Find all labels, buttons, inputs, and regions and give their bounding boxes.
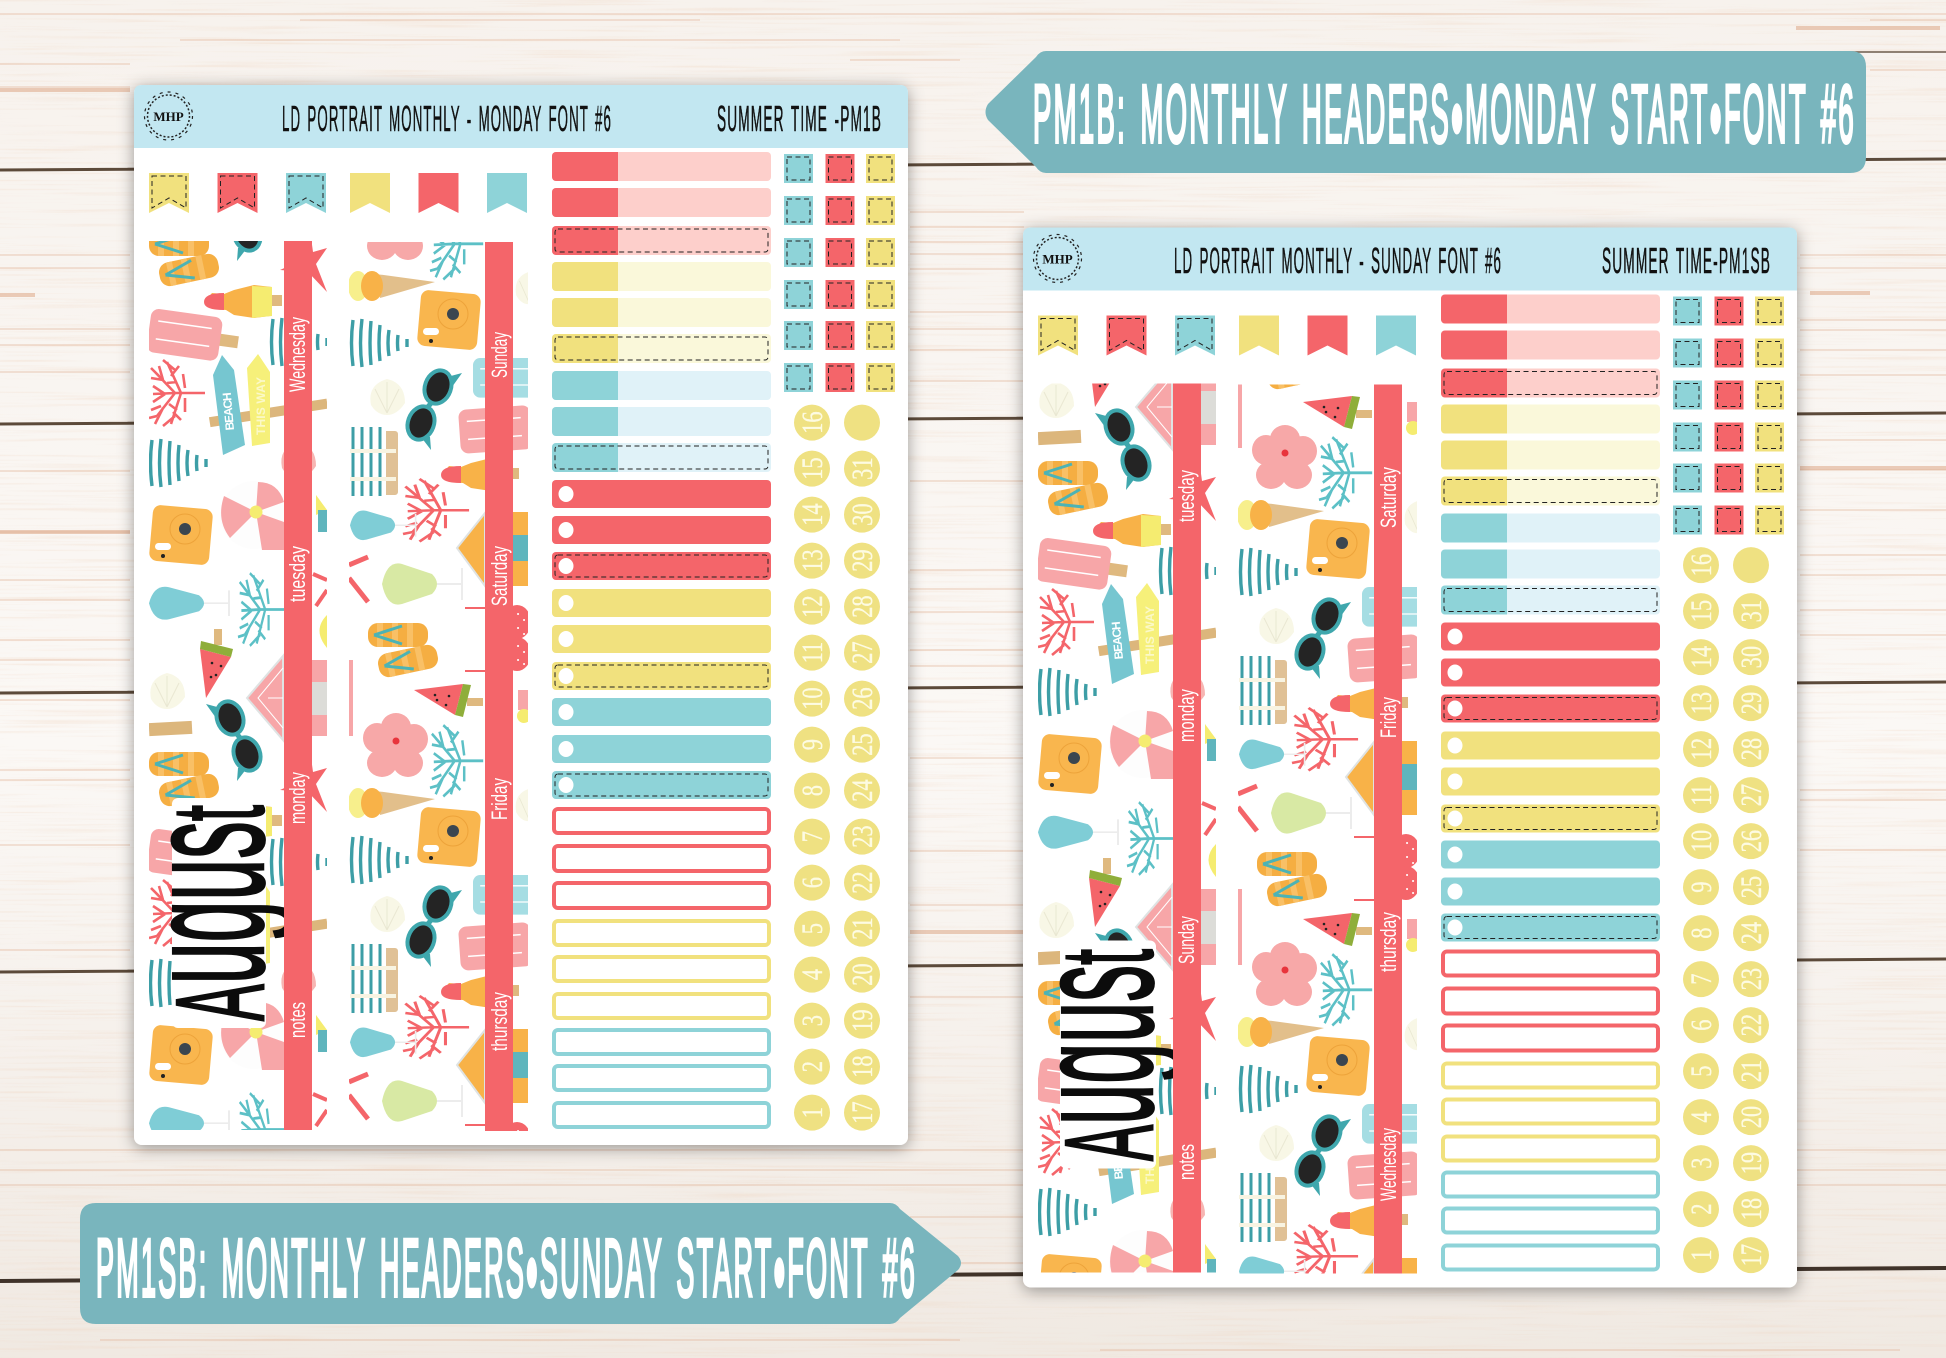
small dashed squares [784,154,895,392]
date circles: 1 [795,1107,829,1118]
date circles: 24 [845,779,879,802]
date circles: 6 [1684,1019,1718,1031]
date circles: 22 [845,871,879,894]
weekday band left: Wednesday [285,317,310,392]
date circles [1683,547,1769,1273]
date circles: 8 [795,785,829,796]
sheet: PM1B Monday start [110,85,908,1260]
date circles: 25 [845,733,879,756]
date circles: 29 [1734,692,1768,714]
outline bars [554,809,769,1127]
patterned strip left [149,241,327,1130]
date circles: 30 [845,503,879,526]
month name: August: August [999,949,1189,1161]
banner: PM1B monthly headers, pointing left [986,51,1866,174]
banner: PM1B monthly headers, pointing left: • [1451,62,1465,174]
banner: PM1SB monthly headers, pointing right: PM1SB: MONTHLY HEADERS [96,1223,1406,1314]
date circles: 14 [1684,646,1718,668]
weekday band right: Friday [1376,697,1401,738]
date circles: 13 [795,549,829,572]
date circles: 15 [1684,600,1718,622]
date circles: 18 [845,1055,879,1078]
bars with white dot [1441,622,1660,942]
date circles: 26 [1734,830,1768,852]
date circles: 20 [1734,1106,1768,1128]
date circles: 31 [1734,600,1768,622]
logo: MHP wreath [144,92,192,140]
date circles: 2 [1684,1203,1718,1215]
banner: PM1SB monthly headers, pointing right: SUNDAY START [540,1223,774,1314]
date circles: 17 [1734,1244,1768,1266]
date circles: 10 [1684,830,1718,852]
weekday band right [485,242,513,1131]
weekday band right: thursday [1376,912,1401,972]
date circles: 31 [845,457,879,480]
date circles: 28 [845,595,879,618]
date circles: 9 [795,739,829,750]
date circles: 22 [1734,1014,1768,1036]
weekday band left: Sunday [1174,916,1199,964]
banner: PM1SB monthly headers, pointing right [80,1203,961,1328]
date circles: 12 [795,595,829,618]
date circles: 27 [845,641,879,664]
sheet: PM1SB Sunday start [999,228,1797,1332]
two-tone header bars [552,152,771,472]
weekday band right: Friday [487,778,512,820]
date circles: 20 [845,963,879,986]
weekday band right: thursday [487,992,512,1051]
banner: PM1SB monthly headers, pointing right: • [774,1216,787,1328]
date circles: 13 [1684,692,1718,714]
date circles: 23 [1734,968,1768,990]
weekday band right: Saturday [1376,467,1401,528]
date circles [794,405,880,1131]
patterned strip left [1038,384,1216,1272]
date circles: 10 [795,687,829,710]
text: SUMMER TIME -PM1B [717,98,882,139]
date circles: 16 [1684,554,1718,576]
date circles: 15 [795,457,829,480]
date circles: 17 [845,1101,879,1124]
logo: MHP wreath: MHP [1042,252,1073,266]
date circles: 5 [1684,1065,1718,1077]
date circles: 21 [845,917,879,940]
date circles: 27 [1734,784,1768,806]
banner: PM1SB monthly headers, pointing right: • [526,1216,540,1328]
small dashed squares [1673,296,1784,534]
patterned strip right [349,242,528,1131]
white backing behind month name [1060,940,1156,1168]
date circles: 11 [795,642,829,663]
weekday band right: Wednesday [1376,1128,1401,1201]
sheet card [134,85,908,1145]
pennant flags [149,173,527,213]
patterned strip right [1238,384,1417,1274]
weekday band right [1374,384,1402,1274]
date circles: 6 [795,877,829,888]
weekday band left: tuesday [285,546,310,602]
date circles: 16 [795,411,829,434]
sheet header bar [1023,228,1797,290]
weekday band left [1173,384,1201,1272]
date circles: 3 [1684,1157,1718,1169]
date circles: 8 [1684,927,1718,939]
sheet card [1023,228,1797,1288]
date circles: 19 [1734,1152,1768,1174]
date circles: 26 [845,687,879,710]
date circles: 7 [795,831,829,842]
date circles: 2 [795,1061,829,1072]
date circles: 1 [1684,1249,1718,1261]
weekday band left: monday [285,772,310,824]
date circles: 21 [1734,1060,1768,1082]
date circles: 19 [845,1009,879,1032]
two-tone header bars [1441,294,1660,614]
date circles: 18 [1734,1198,1768,1220]
white backing behind month name [172,798,266,1028]
weekday band right: Sunday [487,332,512,378]
date circles: 29 [845,549,879,572]
date circles: 3 [795,1015,829,1026]
weekday band left: tuesday [1174,470,1199,522]
outline bars [1443,952,1658,1270]
weekday band left: monday [1174,689,1199,742]
date circles: 25 [1734,876,1768,898]
sheet: PM1B Monday start: LD PORTRAIT MONTHLY - MONDAY FONT #6 [282,98,612,139]
date circles: 24 [1734,922,1768,944]
date circles: 7 [1684,973,1718,985]
date circles: 11 [1684,784,1718,806]
weekday band right: Saturday [487,546,512,606]
weekday band left [284,241,312,1130]
date circles: 30 [1734,646,1768,668]
weekday band left: notes [1174,1144,1199,1180]
bars with white dot [552,480,771,799]
date circles: 9 [1684,881,1718,893]
month name: August: August [110,805,300,1021]
date circles: 4 [1684,1111,1718,1123]
sheet header bar [134,85,908,148]
date circles: 12 [1684,738,1718,760]
logo: MHP wreath [1034,234,1082,282]
date circles: 28 [1734,738,1768,760]
text: FONT #6 [787,1223,917,1314]
banner: PM1B monthly headers, pointing left: • [1710,62,1724,174]
logo: MHP wreath: MHP [153,109,184,124]
date circles: 5 [795,923,829,934]
pennant flags [1038,316,1416,356]
weekday band left: notes [285,1002,310,1038]
date circles: 14 [795,503,829,526]
date circles: 23 [845,825,879,848]
date circles: 4 [795,969,829,980]
